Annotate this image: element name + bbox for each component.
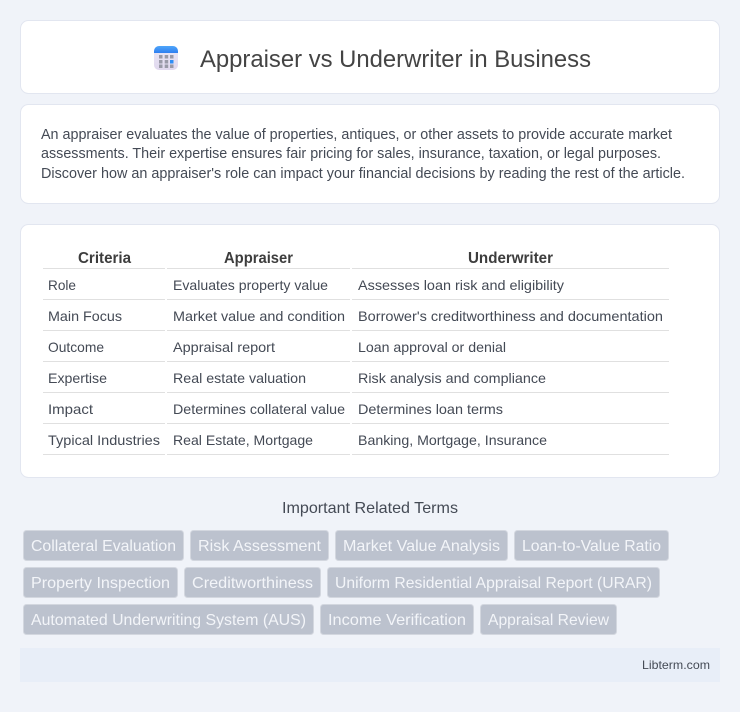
- footer: [20, 648, 720, 682]
- table row: outcome: Loan approval or denial: [358, 339, 506, 355]
- table row: outcome: Outcome: [48, 339, 104, 355]
- tag: URAR: [328, 568, 660, 598]
- tag: property inspection: [24, 568, 178, 598]
- table row: main focus: [48, 308, 663, 324]
- table header: [78, 250, 553, 267]
- tag: income verification: [320, 604, 474, 634]
- text block: introduction: [41, 127, 685, 182]
- table row: role: Evaluates property value: [173, 277, 328, 293]
- panel: comparison table: [20, 224, 720, 478]
- table row: role: Assesses loan risk and eligibility: [358, 277, 564, 293]
- tag: AUS: Automated Underwriting System (AUS): [31, 612, 306, 629]
- tag: income verification: Income Verification: [328, 612, 466, 629]
- table row: impact: Determines collateral value: [173, 401, 345, 417]
- table row: typical industries: Typical Industries: [48, 432, 160, 448]
- tag: creditworthiness: Creditworthiness: [192, 575, 313, 592]
- tag: collateral evaluation: Collateral Evaluation: [31, 538, 176, 555]
- heading: related terms: Important Related Terms: [282, 500, 458, 517]
- panel: introduction: [20, 104, 720, 204]
- table row: main focus: Market value and condition: [173, 308, 345, 324]
- text block: introduction: Discover how an appraiser's role can impact your financial decisions by reading the rest of the article.: [41, 166, 685, 182]
- tag: risk assessment: Risk Assessment: [198, 538, 322, 555]
- tag: market value analysis: [336, 530, 508, 560]
- tag: risk assessment: [190, 530, 328, 560]
- icon: calendar: [154, 46, 178, 70]
- tag: appraisal review: Appraisal Review: [488, 612, 609, 629]
- title: Appraiser vs Underwriter in Business: [200, 46, 591, 73]
- table row: impact: [48, 401, 503, 417]
- footer credit: Libterm.com: [642, 658, 710, 672]
- table header: Criteria: [78, 250, 131, 267]
- table row: main focus: Main Focus: [48, 308, 122, 324]
- table row: typical industries: Banking, Mortgage, Insurance: [358, 432, 547, 448]
- related terms tags: [24, 530, 668, 634]
- tag: AUS: [24, 604, 314, 634]
- table row: role: Role: [48, 277, 76, 293]
- tag: loan-to-value ratio: [514, 530, 668, 560]
- table row: expertise: Expertise: [48, 370, 107, 386]
- tag: URAR: Uniform Residential Appraisal Report (URAR): [335, 575, 652, 592]
- tag: collateral evaluation: [24, 530, 184, 560]
- table row: outcome: Appraisal report: [173, 339, 275, 355]
- table row: main focus: Borrower's creditworthiness and documentation: [358, 308, 663, 324]
- tag: creditworthiness: [184, 568, 320, 598]
- text block: introduction: assessments. Their expertise ensures fair pricing for sales, insurance, taxation, or legal purposes.: [41, 146, 661, 162]
- table row: expertise: Real estate valuation: [173, 370, 306, 386]
- table row: impact: Impact: [48, 401, 93, 417]
- tag: market value analysis: Market Value Analysis: [343, 538, 500, 555]
- tag: property inspection: Property Inspection: [31, 575, 170, 592]
- table header: Underwriter: [468, 250, 553, 267]
- table row: typical industries: [48, 432, 547, 448]
- table row: impact: Determines loan terms: [358, 401, 503, 417]
- table row: outcome: [48, 339, 506, 355]
- table header: Appraiser: [224, 250, 293, 267]
- table row: role: [48, 277, 564, 293]
- panel: header: [20, 20, 720, 94]
- tag: appraisal review: [480, 604, 616, 634]
- text block: introduction: An appraiser evaluates the value of properties, antiques, or other assets to provide accurate market: [41, 127, 672, 143]
- table row: expertise: [48, 370, 546, 386]
- tag: loan-to-value ratio: Loan-to-Value Ratio: [522, 538, 661, 555]
- table row: typical industries: Real Estate, Mortgage: [173, 432, 313, 448]
- table row: expertise: Risk analysis and compliance: [358, 370, 546, 386]
